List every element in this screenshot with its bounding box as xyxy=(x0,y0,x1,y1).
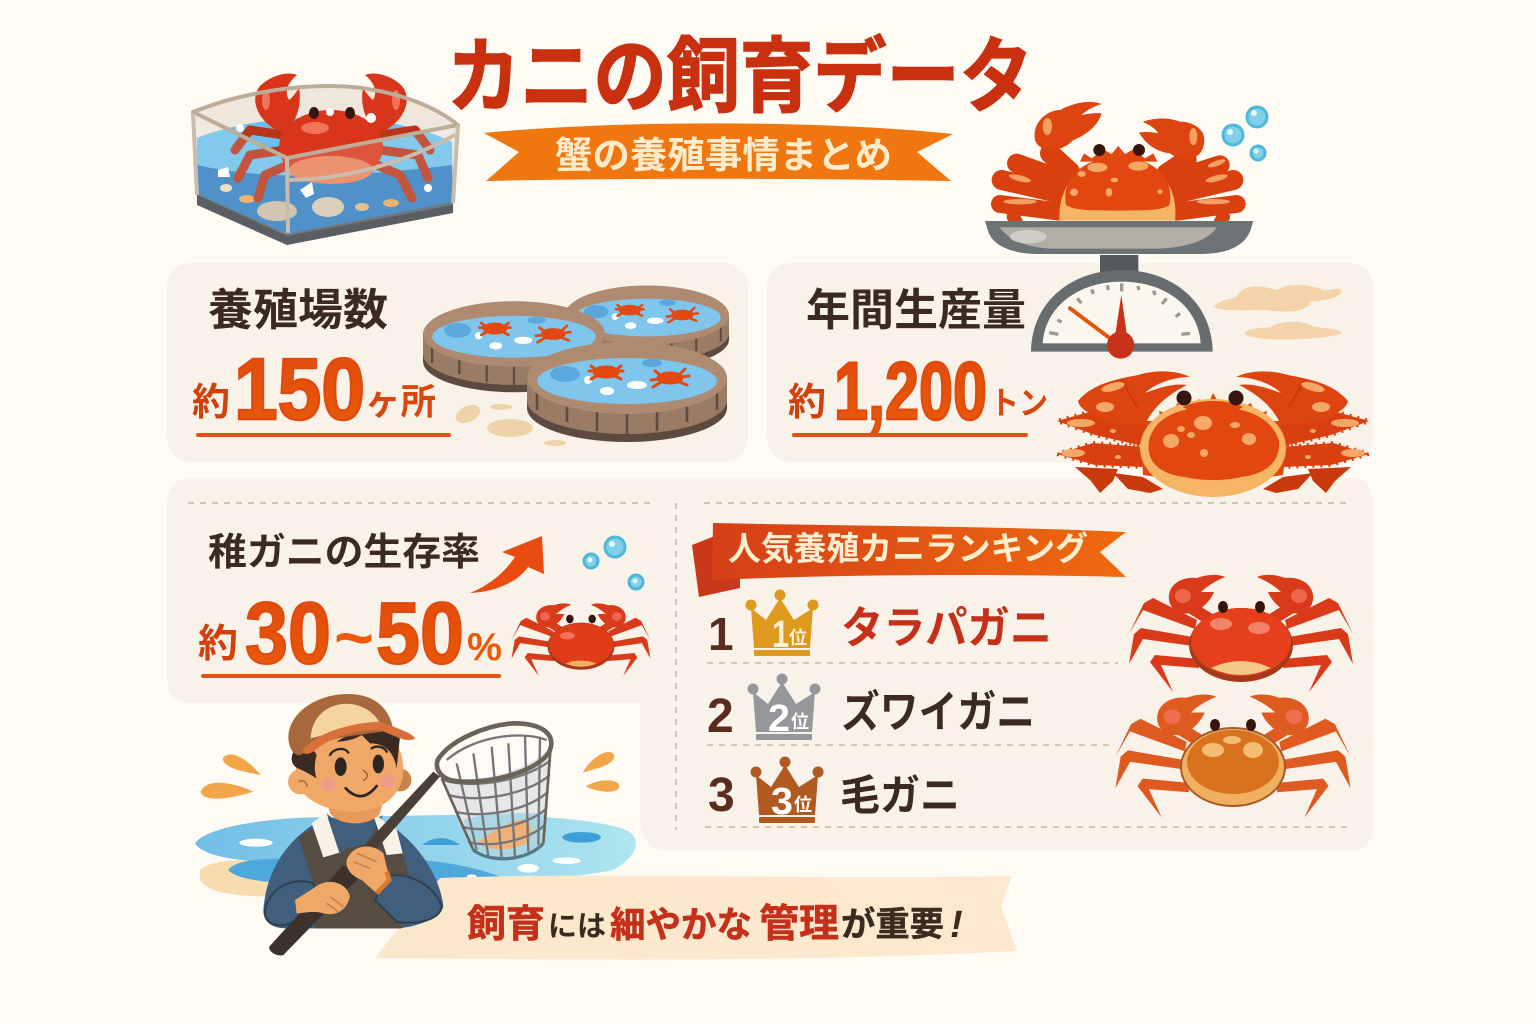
clouds xyxy=(1213,285,1342,340)
head xyxy=(288,694,415,812)
heading: 年間生産量: 年間生産量 xyxy=(806,274,1026,338)
stat: 約30〜50% xyxy=(198,585,502,682)
stat: 約30〜50%: ~ xyxy=(334,600,374,674)
icon: bronze crown: 位 xyxy=(794,791,812,817)
message banner: ! xyxy=(950,904,963,946)
stat: 約1,200トン: 1,200 xyxy=(834,346,987,437)
arrow: rising survival xyxy=(470,536,544,593)
icon: silver crown xyxy=(748,674,820,740)
message banner: には xyxy=(548,903,606,945)
heading: 稚ガニの生存率: 稚ガニの生存率 xyxy=(208,521,480,576)
scale dial xyxy=(1031,270,1213,359)
stat: 約150ヶ所: 150 xyxy=(234,341,365,438)
subtitle banner xyxy=(484,123,953,181)
stat: 約150ヶ所 xyxy=(192,341,451,438)
stat: 約150ヶ所: 約 xyxy=(192,371,230,426)
rank row 1: 1 xyxy=(708,608,734,660)
rank row 1 xyxy=(708,590,1052,660)
hands xyxy=(295,847,390,914)
net xyxy=(437,723,551,859)
icon: large red king crab xyxy=(1057,371,1369,497)
icon: silver crown: 2 xyxy=(768,698,790,740)
scale pan xyxy=(985,221,1253,254)
icon: gold crown: 1 xyxy=(772,614,789,656)
rank row 2: ズワイガニ xyxy=(841,676,1035,740)
top crab xyxy=(1000,102,1237,223)
rank row 3: 毛ガニ xyxy=(840,762,960,823)
panel: survival rate and ranking xyxy=(167,478,1373,851)
stat: 約150ヶ所: ヶ所 xyxy=(365,373,436,425)
icon: small crab xyxy=(512,603,650,676)
body xyxy=(263,800,443,928)
stat: 約30〜50%: 30 xyxy=(245,585,331,682)
message banner: 飼育 xyxy=(467,893,545,948)
stat: 約30〜50%: 約 xyxy=(198,613,238,669)
icon: crab on kitchen scale xyxy=(985,102,1342,359)
icon: red king crab xyxy=(1129,575,1353,692)
stat: 約1,200トン: トン xyxy=(990,378,1048,424)
scale stem xyxy=(1100,255,1138,275)
icon: round wooden tanks xyxy=(423,285,729,446)
rank row 3: 3 xyxy=(708,769,735,822)
rank row 3 xyxy=(708,756,960,823)
heading: 養殖場数: 養殖場数 xyxy=(208,274,388,338)
stat: 約30〜50%: 50 xyxy=(376,585,464,682)
message banner: が重要 xyxy=(841,897,944,946)
message banner: 管理 xyxy=(759,893,839,949)
rank row 2 xyxy=(707,674,1035,743)
icon: fisherman with landing net xyxy=(201,694,619,955)
icon: silver crown: 位 xyxy=(791,708,809,734)
subtitle banner: 蟹の養殖事情まとめ xyxy=(555,125,892,179)
stat: 約1,200トン: 約 xyxy=(788,371,826,426)
splash marks xyxy=(201,752,619,799)
water pond xyxy=(195,815,636,897)
icon: snow crab xyxy=(1115,695,1351,818)
net handle xyxy=(269,772,440,955)
message banner: 細やかな xyxy=(610,896,752,948)
icon: bronze crown: 3 xyxy=(771,781,793,823)
ranking ribbon xyxy=(692,522,1126,597)
panel: 養殖場数 xyxy=(167,263,748,462)
rank row 1: タラパガニ xyxy=(841,592,1052,656)
panel: 年間生産量 xyxy=(767,263,1373,462)
icon: crab in glass tank xyxy=(193,73,458,245)
icon: gold crown xyxy=(746,590,818,656)
ranking ribbon: 人気養殖カニランキング xyxy=(728,522,1088,570)
icon: gold crown: 位 xyxy=(789,624,807,650)
bubbles near scale xyxy=(1223,107,1267,160)
stat: 約30〜50%: % xyxy=(467,626,502,669)
icon: bronze crown xyxy=(750,756,824,823)
title: カニの飼育データ xyxy=(447,10,1033,129)
bubbles near small crab xyxy=(584,537,643,589)
message banner xyxy=(375,876,1017,960)
rank row 2: 2 xyxy=(707,690,734,743)
